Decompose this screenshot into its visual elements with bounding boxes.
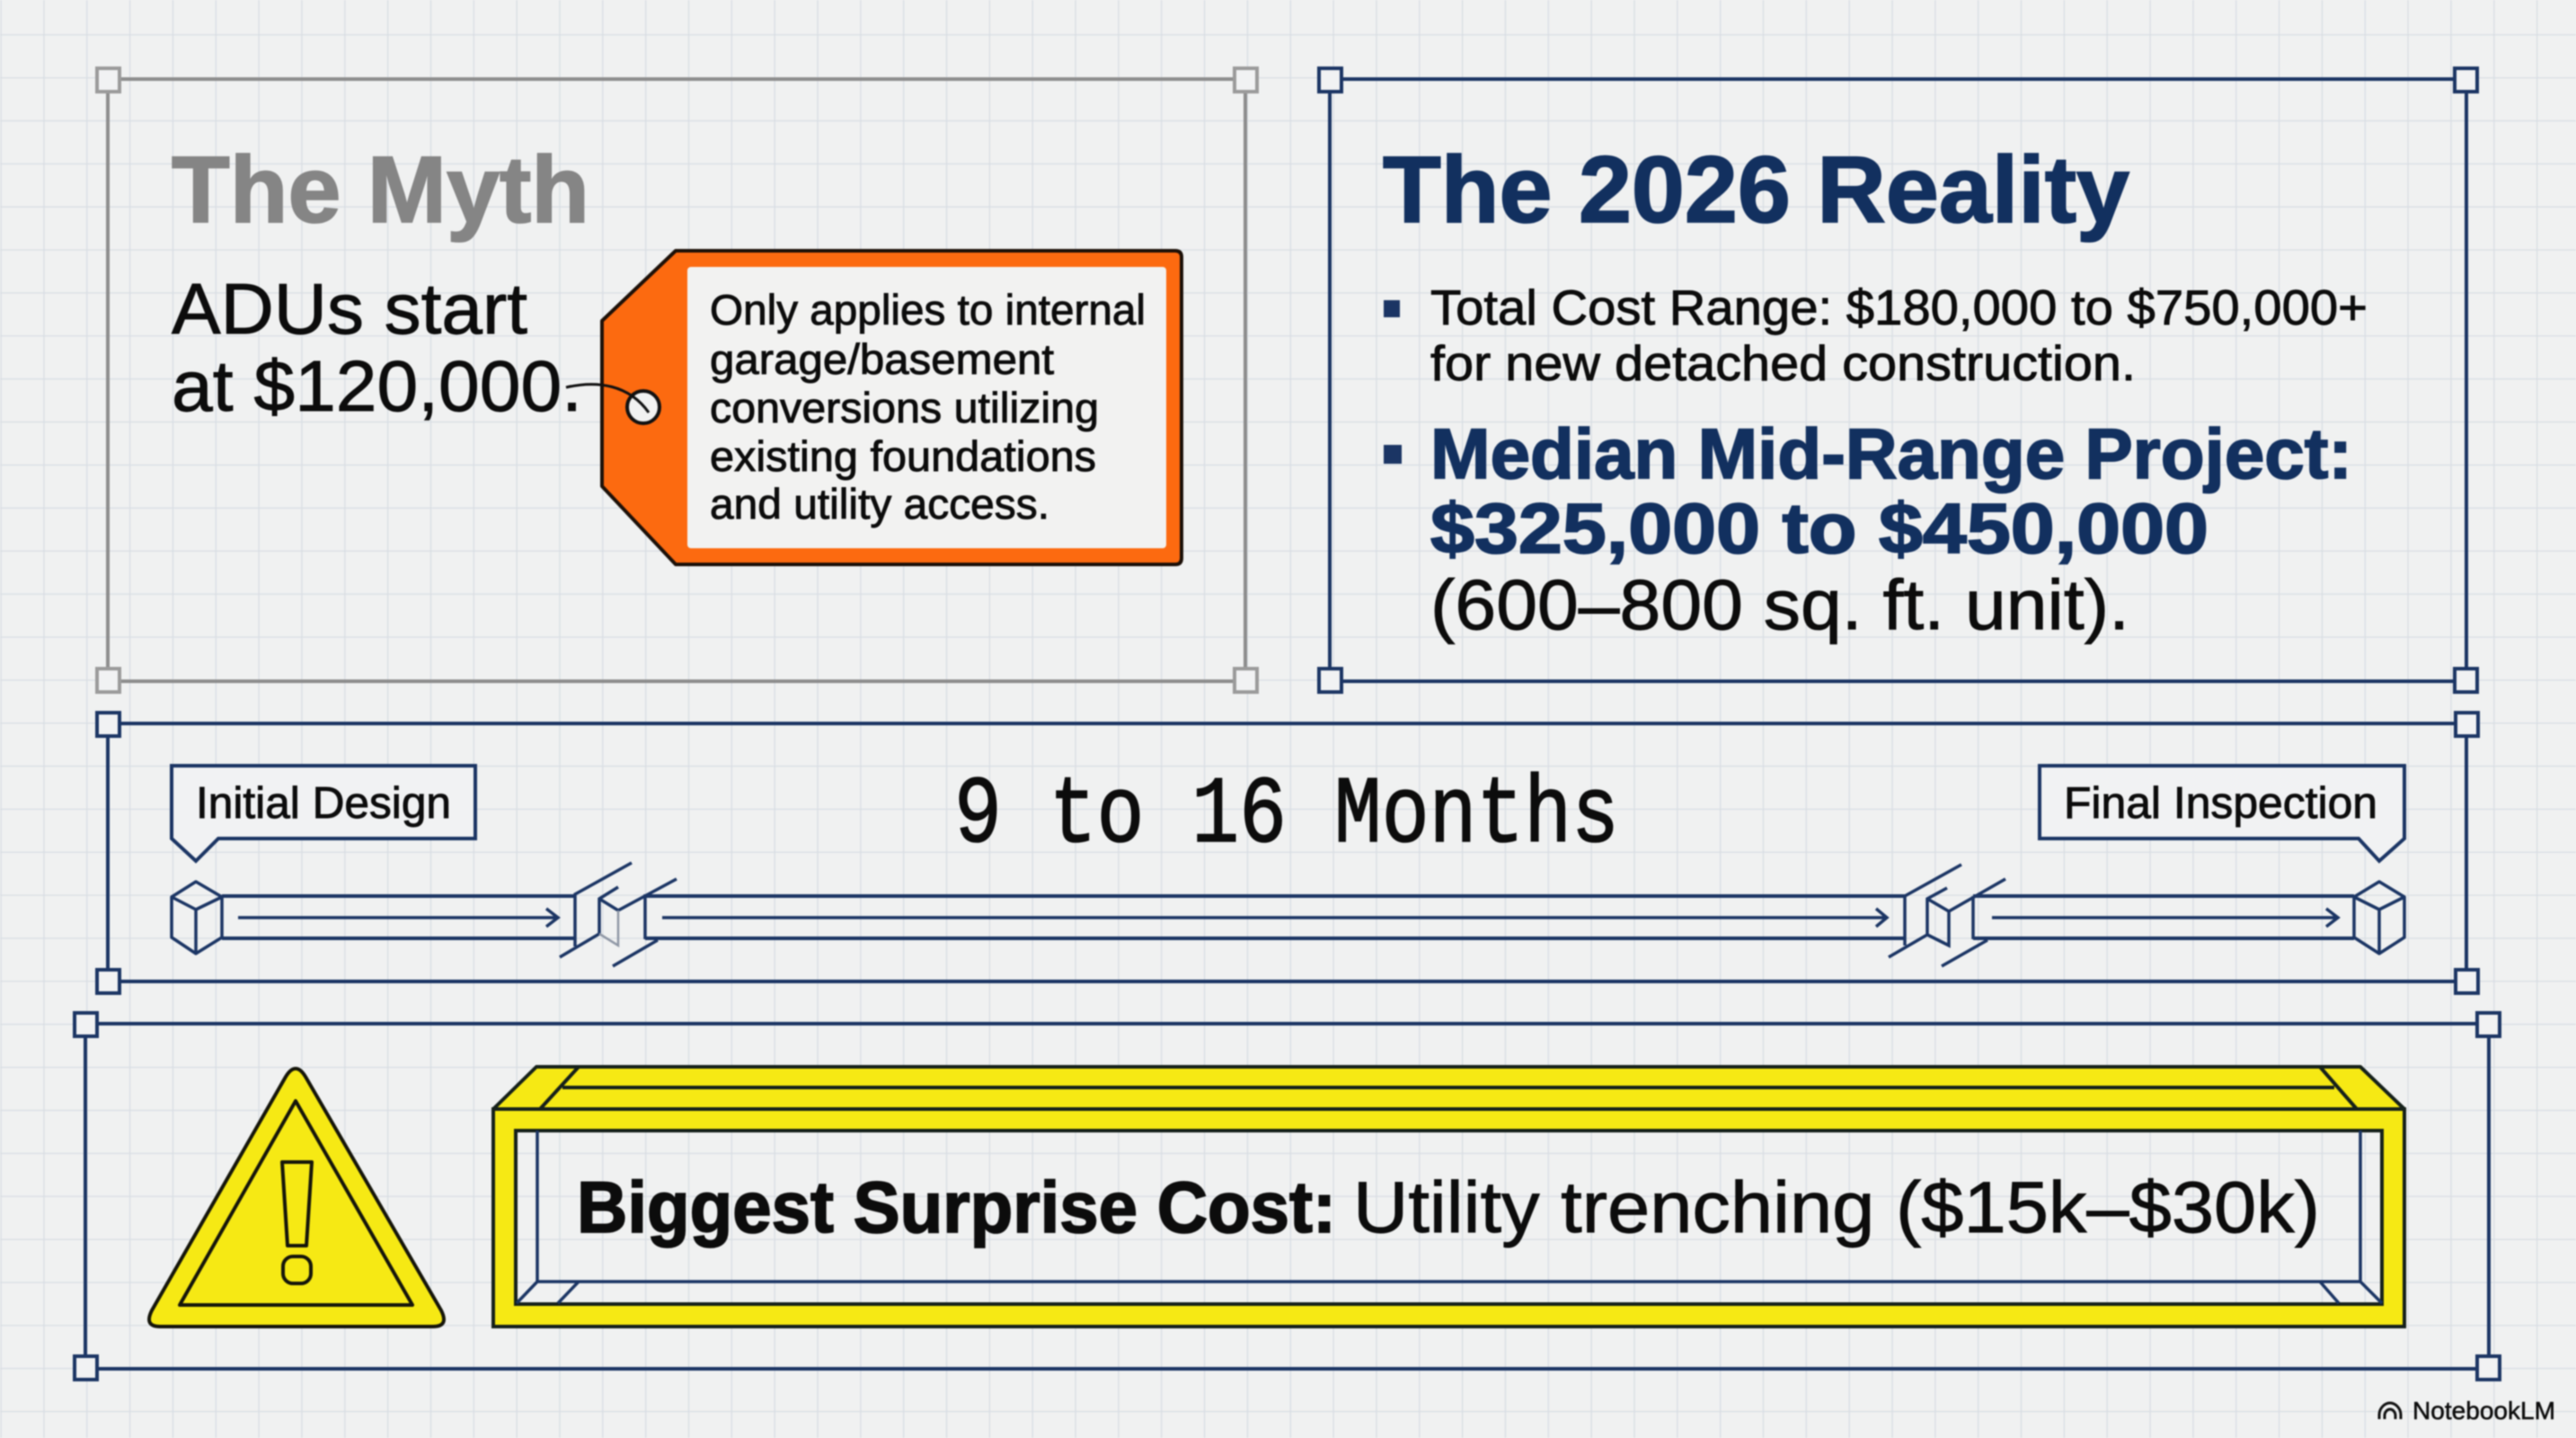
timeline duration: 9 to 16 Months xyxy=(954,762,1619,870)
callout: final inspection xyxy=(2040,766,2404,861)
icon: warning triangle xyxy=(149,1069,444,1327)
heading: the myth: The Myth xyxy=(172,138,589,243)
myth statement xyxy=(172,269,582,426)
callout: initial design: Initial Design xyxy=(196,779,451,828)
timeline bar segment 1 xyxy=(222,896,575,938)
callout text: Utility trenching ($15k–$30k) xyxy=(1353,1167,2320,1248)
break symbol 1 xyxy=(560,863,677,966)
myth statement: at $120,000. xyxy=(172,346,582,426)
bullet: median mid-range project: Median Mid-Range Project: xyxy=(1430,413,2352,493)
tag text: Only applies to internal xyxy=(710,286,1146,333)
panel: the 2026 reality xyxy=(1319,68,2477,692)
callout text: Biggest Surprise Cost: xyxy=(577,1167,1336,1248)
icon: start cube xyxy=(172,882,222,954)
myth statement: ADUs start xyxy=(172,269,527,349)
tag text: garage/basement xyxy=(710,335,1054,383)
bullet: median mid-range project: $325,000 to $450,000 xyxy=(1430,488,2209,568)
bullet: median mid-range project: (600–800 sq. ft. unit). xyxy=(1430,564,2129,644)
icon: orange price tag xyxy=(566,251,1182,564)
tag text: existing foundations xyxy=(710,432,1096,480)
panel: timeline xyxy=(97,713,2478,993)
callout: initial design xyxy=(172,766,475,861)
timeline bar segment 2 xyxy=(645,896,1905,938)
icon: end cube xyxy=(2354,882,2404,954)
callout: yellow frame xyxy=(493,1067,2404,1327)
callout: final inspection: Final Inspection xyxy=(2064,779,2377,828)
callout text xyxy=(577,1167,2320,1248)
heading: the 2026 reality: The 2026 Reality xyxy=(1383,138,2129,243)
break symbol 2 xyxy=(1889,865,2005,966)
panel: biggest surprise cost xyxy=(75,1013,2500,1380)
tag text xyxy=(710,286,1146,528)
bullet: total cost range: for new detached construction. xyxy=(1430,335,2136,391)
tag text: and utility access. xyxy=(710,480,1049,528)
bullet: total cost range: Total Cost Range: $180,000 to $750,000+ xyxy=(1430,280,2368,335)
tag text: conversions utilizing xyxy=(710,384,1099,431)
timeline bar segment 3 xyxy=(1973,896,2354,938)
bullet: median mid-range project xyxy=(1384,413,2352,644)
watermark: NotebookLM: NotebookLM xyxy=(2412,1397,2555,1425)
bullet: total cost range xyxy=(1384,280,2368,391)
